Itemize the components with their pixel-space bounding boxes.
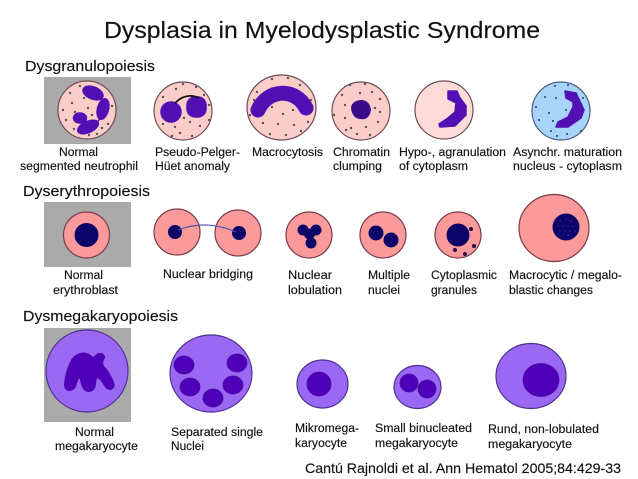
cell: nuclear lobulation: [286, 212, 332, 258]
label: normal erythroblast: [53, 270, 119, 297]
heading: dysmegakaryopoiesis: Dysmegakaryopoiesis: [23, 308, 178, 325]
label: normal segmented neutrophil: segmented neutrophil: [20, 161, 138, 173]
label: normal erythroblast: Normal: [64, 270, 103, 282]
label: mikromegakaryocyte: [295, 423, 359, 450]
cell: hypo-, agranulation of cytoplasm: [415, 81, 473, 139]
cell: cytoplasmic granules: [435, 212, 481, 258]
label: multiple nuclei: Multiple: [368, 270, 410, 282]
label: round non-lobulated megakaryocyte: Rund, non-lobulated: [488, 424, 599, 436]
label: small binucleated megakaryocyte: Small binucleated: [375, 423, 472, 435]
label: asynchronous maturation: nucleus - cytoplasm: [513, 161, 622, 173]
cell: pseudo-Pelger-Huet anomaly: [154, 82, 212, 140]
label: small binucleated megakaryocyte: [375, 423, 472, 450]
label: normal megakaryocyte: [55, 427, 138, 453]
label: nuclear lobulation: lobulation: [288, 285, 342, 297]
label: small binucleated megakaryocyte: megakaryocyte: [375, 438, 458, 450]
label: separated single nuclei: Nuclei: [171, 441, 204, 453]
label: asynchronous maturation: Asynchr. maturation: [513, 147, 622, 159]
label: multiple nuclei: [368, 270, 410, 297]
cell: macrocytosis: [247, 75, 316, 140]
label: hypo-, agranulation of cytoplasm: of cytoplasm: [399, 161, 468, 173]
title: Dysplasia in Myelodysplastic Syndrome: [104, 17, 540, 43]
cell: normal segmented neutrophil: [44, 77, 131, 144]
label: mikromegakaryocyte: Mikromega-: [295, 423, 359, 435]
label: cytoplasmic granules: [431, 270, 497, 297]
cell: nuclear bridging: [154, 209, 261, 256]
heading: dysgranulopoiesis: Dysgranulopoiesis: [25, 58, 155, 75]
label: chromatin clumping: [333, 147, 390, 173]
label: macrocytic / megaloblastic changes: [509, 270, 622, 297]
cell: mikromegakaryocyte: [297, 360, 348, 408]
label: macrocytic / megaloblastic changes: Macrocytic / megalo-: [509, 270, 622, 282]
heading: dyserythropoiesis: Dyserythropoiesis: [23, 183, 150, 200]
cell: normal megakaryocyte: [44, 328, 131, 422]
label: nuclear lobulation: Nuclear: [288, 270, 332, 282]
cell: normal erythroblast: [44, 202, 131, 267]
label: cytoplasmic granules: granules: [431, 285, 477, 297]
label: hypo-, agranulation of cytoplasm: Hypo-, agranulation: [399, 147, 506, 159]
label: asynchronous maturation: [513, 147, 622, 173]
label: chromatin clumping: clumping: [333, 161, 382, 173]
label: pseudo-Pelger-Huet anomaly: Pseudo-Pelger-: [155, 147, 240, 159]
label: normal erythroblast: erythroblast: [53, 285, 119, 297]
label: nuclear bridging: Nuclear bridging: [163, 269, 253, 281]
label: nuclear lobulation: [288, 270, 342, 297]
label: separated single nuclei: Separated single: [171, 427, 263, 439]
label: multiple nuclei: nuclei: [368, 285, 400, 297]
label: normal megakaryocyte: megakaryocyte: [55, 441, 138, 453]
label: macrocytic / megaloblastic changes: blastic changes: [509, 285, 593, 297]
label: mikromegakaryocyte: karyocyte: [295, 438, 347, 450]
label: normal segmented neutrophil: Normal: [59, 147, 98, 159]
label: macrocytosis: Macrocytosis: [252, 147, 323, 159]
label: separated single nuclei: [171, 427, 263, 453]
label: normal megakaryocyte: Normal: [75, 427, 114, 439]
cell: round non-lobulated megakaryocyte: [496, 344, 566, 408]
label: cytoplasmic granules: Cytoplasmic: [431, 270, 497, 282]
cell: macrocytic / megaloblastic changes: [519, 194, 589, 262]
cell: small binucleated megakaryocyte: [394, 366, 441, 408]
label: pseudo-Pelger-Huet anomaly: Hüet anomaly: [155, 161, 230, 173]
cell: separated single nuclei: [170, 335, 252, 412]
cell: chromatin clumping: [332, 82, 390, 140]
label: normal segmented neutrophil: [20, 147, 138, 173]
cell: asynchronous maturation: [532, 82, 590, 140]
label: chromatin clumping: Chromatin: [333, 147, 390, 159]
label: round non-lobulated megakaryocyte: megakaryocyte: [488, 439, 572, 451]
cell: multiple nuclei: [360, 212, 406, 258]
citation: Cantú Rajnoldi et al. Ann Hematol 2005;84:429-33: [305, 460, 621, 476]
label: hypo-, agranulation of cytoplasm: [399, 147, 506, 173]
label: round non-lobulated megakaryocyte: [488, 424, 599, 451]
label: pseudo-Pelger-Huet anomaly: [155, 147, 240, 173]
